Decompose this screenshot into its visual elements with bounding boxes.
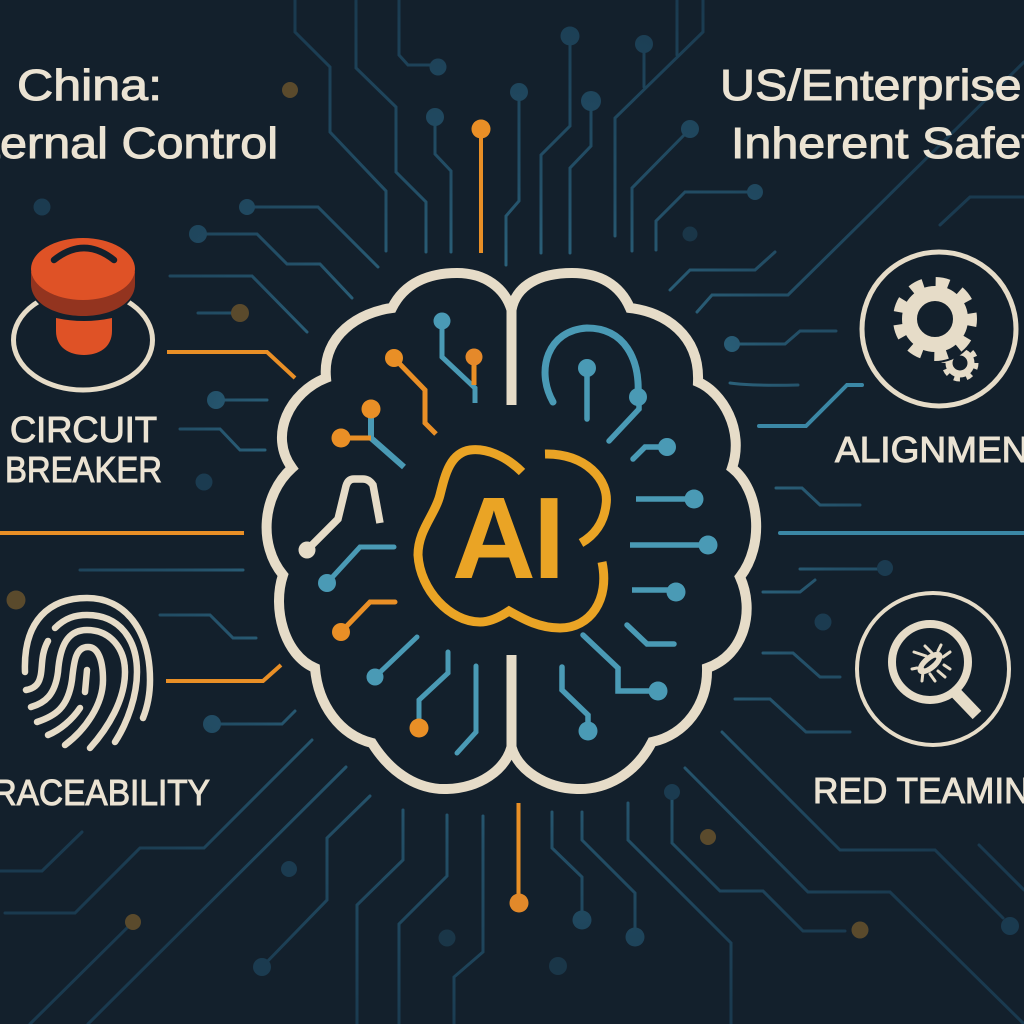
heading: China: China: <box>17 61 162 110</box>
icon: fingerprint <box>25 598 150 748</box>
bright connector: alignment <box>759 385 862 426</box>
AI label: I <box>533 473 565 603</box>
AI cloud outline <box>418 450 606 628</box>
small gear <box>944 347 976 379</box>
label: circuit breaker line 2: BREAKER <box>5 449 162 490</box>
background circuit traces: top <box>282 0 763 265</box>
label: circuit breaker line 1: CIRCUIT <box>10 409 157 450</box>
brain inner traces: left <box>298 312 482 753</box>
icon: circuit breaker button <box>14 238 152 390</box>
large gear <box>898 282 972 356</box>
heading: Inherent Safety: Inherent Safety <box>731 119 1024 168</box>
orange trace: bottom <box>510 803 528 912</box>
brain outline <box>267 273 756 789</box>
bright connector: center right <box>780 531 1024 535</box>
background circuit traces: left <box>0 198 378 1024</box>
background circuit traces: right <box>670 62 1024 732</box>
heading: US/Enterprise: US/Enterprise: <box>720 61 1024 110</box>
brain inner traces: right <box>545 328 718 740</box>
icon: alignment gears <box>862 252 1016 406</box>
left hemisphere <box>267 273 512 789</box>
right hemisphere <box>512 273 756 789</box>
background circuit traces: bottom <box>253 732 1024 1024</box>
AI label: A <box>452 473 536 603</box>
orange connector: center left <box>0 531 244 535</box>
icon: red teaming magnifier with bug <box>857 593 1009 745</box>
orange connector: circuit breaker <box>167 352 295 378</box>
orange connector: traceability <box>166 665 281 681</box>
orange trace: top <box>472 120 490 253</box>
